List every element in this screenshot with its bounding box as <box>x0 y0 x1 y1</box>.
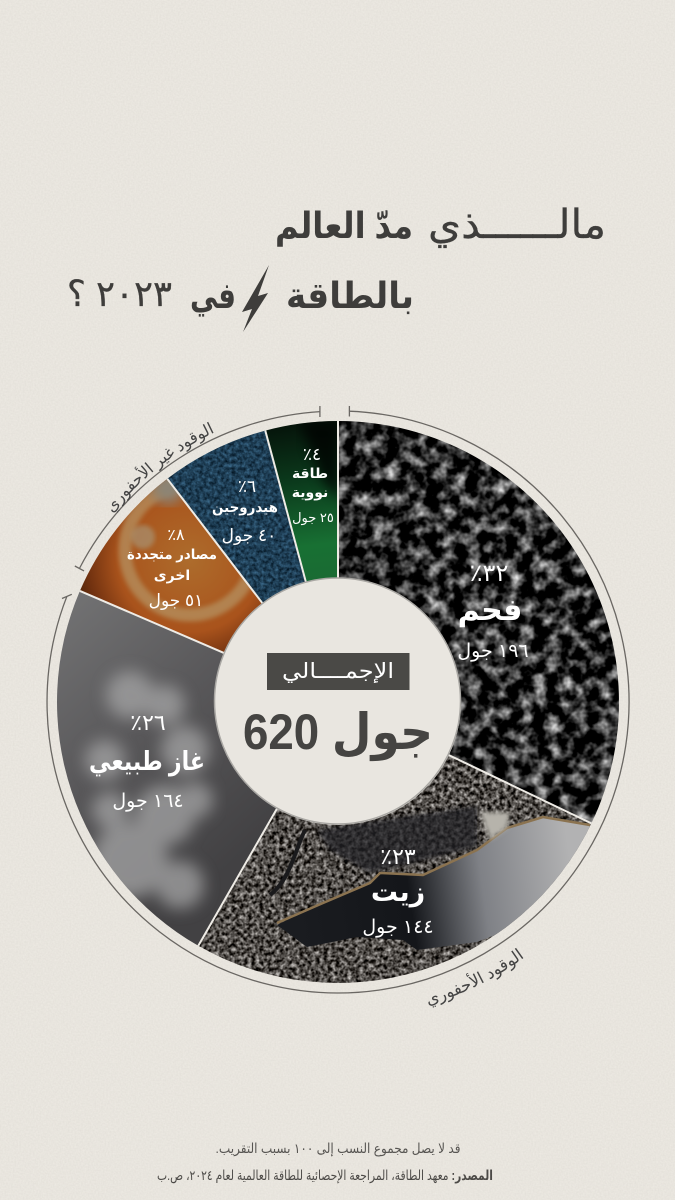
data label: nuclear: ٤٪ <box>303 445 321 464</box>
slice: nuclear <box>265 421 337 582</box>
label: fossil fuels: الوقود الأحفوري <box>428 948 524 1008</box>
title: بالطاقة <box>286 275 414 316</box>
data label: natural gas: ٢٦٪ <box>130 710 166 735</box>
data label: nuclear: نووية <box>292 484 328 501</box>
data label: oil: زيت <box>371 877 425 908</box>
data label: natural gas: ١٦٤ جول <box>112 791 184 812</box>
title: ٢٠٢٣ <box>96 273 172 314</box>
title: ؟ <box>67 273 86 314</box>
data label: other renewables: ٨٪ <box>167 527 185 544</box>
slice: hydrogen <box>167 430 305 602</box>
title: مالــــــذي <box>428 203 606 248</box>
center total value: جول 620 <box>243 704 433 762</box>
data label: hydrogen: ٤٠ جول <box>222 526 276 545</box>
data label: other renewables <box>127 527 217 610</box>
data label: nuclear: طاقة <box>292 465 328 481</box>
data label: natural gas <box>89 710 205 812</box>
source line: المصدر: معهد الطاقة، المراجعة الإحصائية للطاقة العالمية لعام ٢٠٢٤، ص.ب <box>157 1168 493 1184</box>
data label: oil: ٢٣٪ <box>380 844 416 869</box>
footnote: قد لا يصل مجموع النسب إلى ١٠٠ بسبب التقريب. <box>216 1141 460 1157</box>
slice: natural gas <box>55 585 285 950</box>
data label: other renewables: مصادر متجددة <box>127 546 217 562</box>
label: non-fossil fuels: الوقود غير الأحفوري <box>111 422 214 512</box>
slice separators <box>80 421 591 946</box>
pie chart: world energy by source <box>55 418 625 985</box>
center total badge <box>267 653 410 690</box>
title: في <box>190 275 236 317</box>
center circle <box>214 578 460 824</box>
data label: nuclear: ٢٥ جول <box>292 510 334 526</box>
data label: oil <box>362 844 434 938</box>
data label: hydrogen: ٦٪ <box>238 477 256 496</box>
data label: hydrogen <box>212 477 278 545</box>
data label: oil: ١٤٤ جول <box>362 917 434 938</box>
slice: oil <box>195 750 600 985</box>
center total badge: الإجمــــالي <box>282 660 394 683</box>
data label: coal <box>457 560 529 662</box>
arc bracket: non-fossil fuels <box>75 406 320 571</box>
data label: other renewables: ٥١ جول <box>149 591 203 610</box>
data label: natural gas: غاز طبيعي <box>89 746 205 776</box>
title <box>67 203 606 317</box>
data label: coal: ٣٢٪ <box>470 560 508 587</box>
data label: nuclear <box>292 445 334 526</box>
data label: coal: فحم <box>458 594 522 628</box>
data label: hydrogen: هيدروجين <box>212 499 278 516</box>
icon: lightning bolt <box>242 265 269 332</box>
title: مدّ العالم <box>275 205 413 247</box>
data label: other renewables: اخرى <box>154 567 190 584</box>
slice: other renewables <box>80 478 262 652</box>
data label: coal: ١٩٦ جول <box>457 641 529 662</box>
arc bracket: fossil fuels <box>47 406 629 993</box>
slice: coal <box>335 418 625 828</box>
